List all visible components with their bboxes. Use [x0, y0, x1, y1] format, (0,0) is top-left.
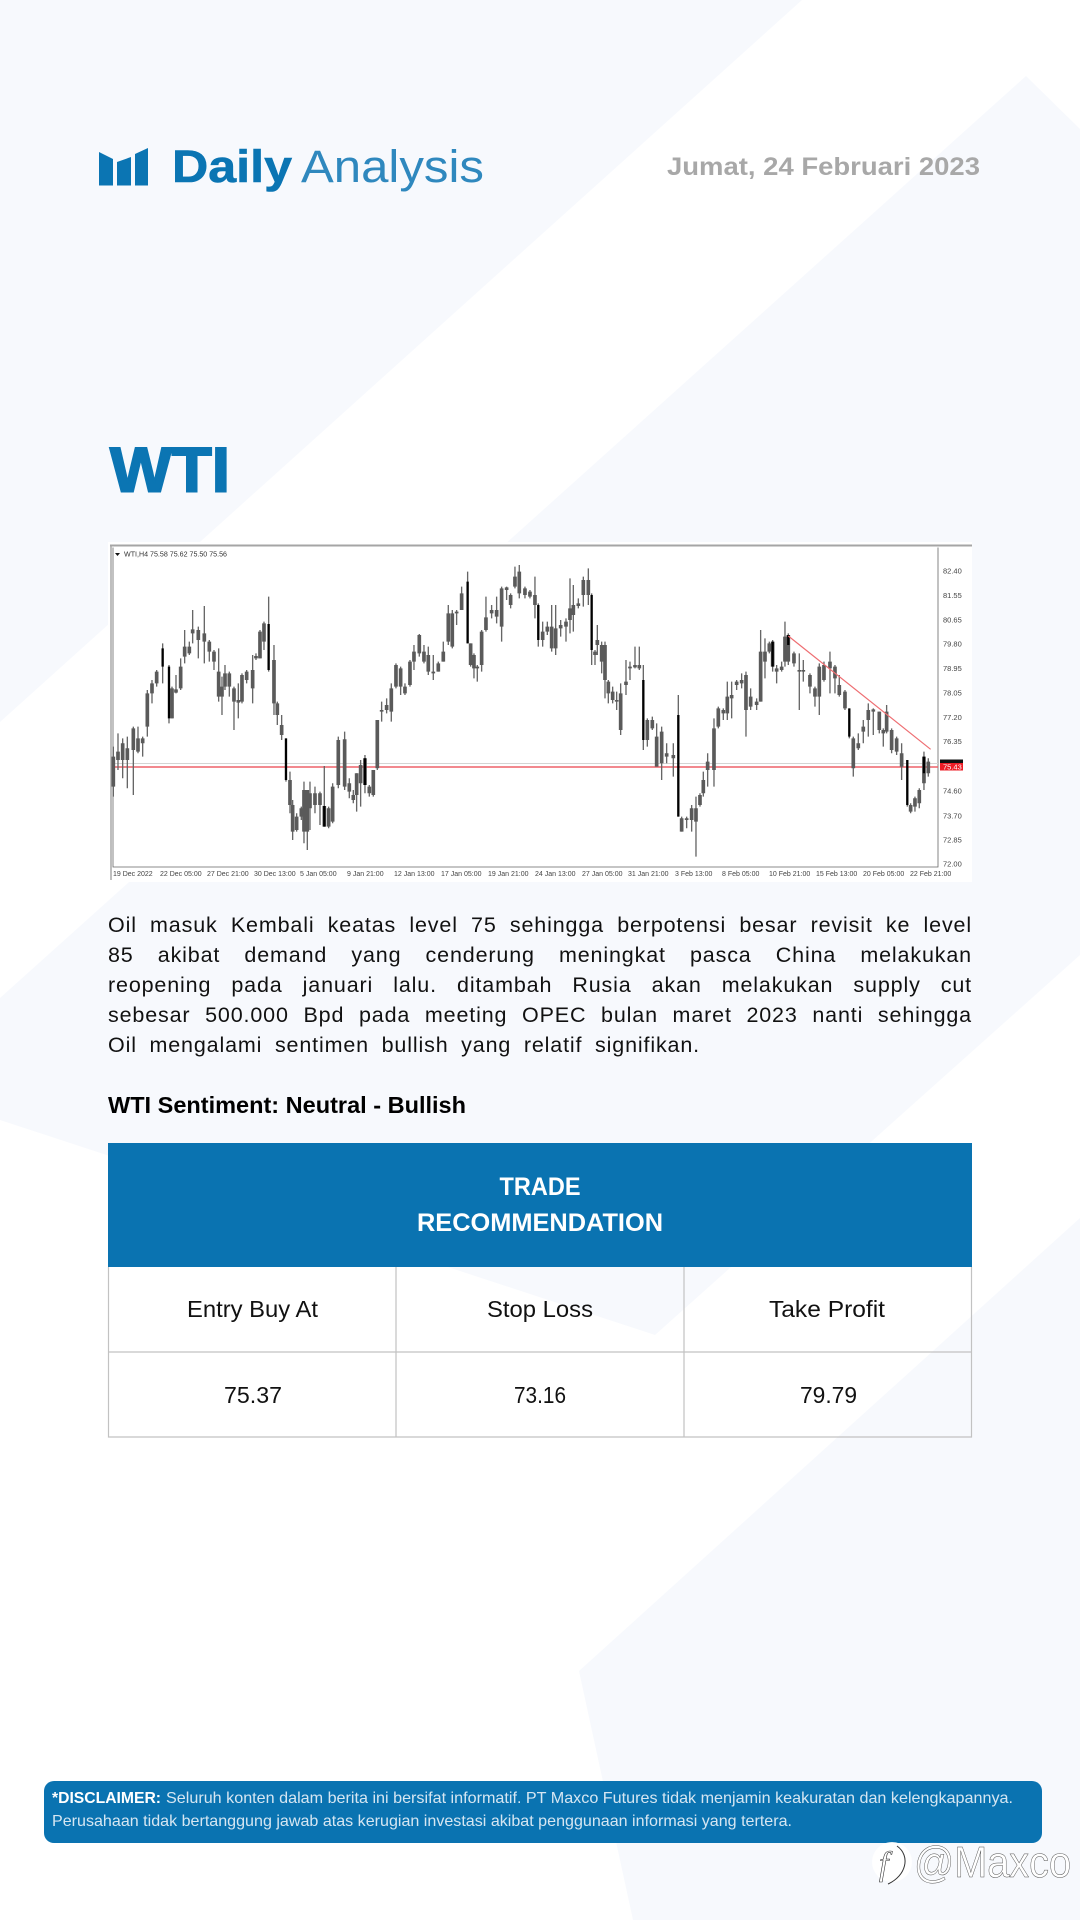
date axis labels: 9 Jan 21:00 [347, 871, 384, 878]
disclaimer: Perusahaan tidak bertanggung jawab atas kerugian investasi akibat penggunaan informasi yang tertera. [52, 1813, 792, 1830]
table header: RECOMMENDATION [417, 1209, 663, 1237]
date axis labels: 31 Jan 21:00 [628, 871, 669, 878]
date axis labels: 27 Dec 21:00 [207, 871, 249, 878]
candlestick chart [110, 544, 972, 880]
disclaimer: Seluruh konten dalam berita ini bersifat informatif. PT Maxco Futures tidak menjamin keakuratan dan kelengkapannya. [166, 1790, 1013, 1807]
disclaimer: *DISCLAIMER: [52, 1790, 161, 1807]
date axis labels: 12 Jan 13:00 [394, 871, 435, 878]
current price tag [940, 760, 963, 772]
date axis labels: 30 Dec 13:00 [254, 871, 296, 878]
watermark: @Maxco: f [879, 1846, 893, 1883]
support lines [113, 764, 938, 767]
date axis labels: 5 Jan 05:00 [300, 871, 337, 878]
header with logo and date [99, 141, 980, 192]
analysis paragraph: Oil mengalami sentimen bullish yang relatif signifikan. [108, 1033, 700, 1057]
date axis labels: 22 Dec 05:00 [160, 871, 202, 878]
date axis labels: 19 Jan 21:00 [488, 871, 529, 878]
table values row [224, 1382, 857, 1408]
date axis labels: 8 Feb 05:00 [722, 871, 759, 878]
chart frame [110, 546, 972, 880]
date axis labels: 10 Feb 21:00 [769, 871, 810, 878]
date axis labels: 15 Feb 13:00 [816, 871, 857, 878]
price axis labels: 82.40 [943, 566, 962, 576]
table labels row: Stop Loss [487, 1296, 593, 1322]
table values row: 75.37 [224, 1382, 282, 1408]
icon: bar chart logo [99, 148, 148, 186]
table labels row: Take Profit [769, 1296, 886, 1322]
date axis labels: 27 Jan 05:00 [582, 871, 623, 878]
table values row: 79.79 [800, 1382, 857, 1408]
price axis labels: 76.35 [943, 737, 962, 746]
table labels row: Entry Buy At [187, 1296, 319, 1322]
candles: second half [543, 568, 931, 857]
analysis paragraph: 85 akibat demand yang cenderung meningkat pasca China melakukan [108, 943, 972, 967]
date axis labels: 17 Jan 05:00 [441, 871, 482, 878]
price axis labels: 72.00 [943, 860, 962, 868]
analysis paragraph [108, 913, 972, 1057]
logo text: Daily Analysis [172, 141, 484, 192]
date: Jumat, 24 Februari 2023 [667, 153, 980, 181]
price axis labels: 80.65 [943, 616, 962, 624]
date axis labels: 24 Jan 13:00 [535, 871, 576, 878]
price axis labels: 81.55 [943, 591, 962, 600]
logo text: Daily Analysis: Analysis [301, 141, 484, 192]
current price tag: 75.43 [943, 762, 962, 772]
candles: first half [113, 565, 538, 850]
table labels row [187, 1296, 886, 1322]
price axis labels: 78.95 [943, 664, 962, 673]
price axis labels: 72.85 [943, 836, 962, 844]
sentiment line: WTI Sentiment: Neutral - Bullish [108, 1092, 466, 1118]
table header [108, 1143, 972, 1267]
date axis labels: 19 Dec 2022 [113, 871, 153, 878]
date axis labels [113, 871, 951, 878]
analysis paragraph: Oil masuk Kembali keatas level 75 sehingga berpotensi besar revisit ke level [108, 913, 972, 937]
price axis labels: 73.70 [943, 812, 962, 820]
price axis labels [943, 566, 962, 868]
analysis paragraph: sebesar 500.000 Bpd pada meeting OPEC bulan maret 2023 nanti sehingga [108, 1003, 972, 1027]
title: WTI: WTI [110, 436, 230, 506]
chart header text: WTI,H4 75.58 75.62 75.50 75.56 [124, 550, 227, 558]
date axis labels: 22 Feb 21:00 [910, 871, 951, 878]
price axis labels: 78.05 [943, 688, 962, 698]
table values row: 73.16 [514, 1382, 566, 1408]
analysis paragraph: reopening pada januari lalu. ditambah Rusia akan melakukan supply cut [108, 973, 972, 997]
trade recommendation table [108, 1143, 972, 1438]
price axis labels: 74.60 [943, 786, 962, 796]
price axis labels: 77.20 [943, 713, 962, 722]
logo text: Daily Analysis: Daily [172, 141, 292, 192]
date axis labels: 3 Feb 13:00 [675, 871, 712, 878]
date axis labels: 20 Feb 05:00 [863, 871, 904, 878]
table header: TRADE [500, 1173, 580, 1201]
table grid [108, 1267, 972, 1437]
price axis labels: 79.80 [943, 640, 962, 648]
